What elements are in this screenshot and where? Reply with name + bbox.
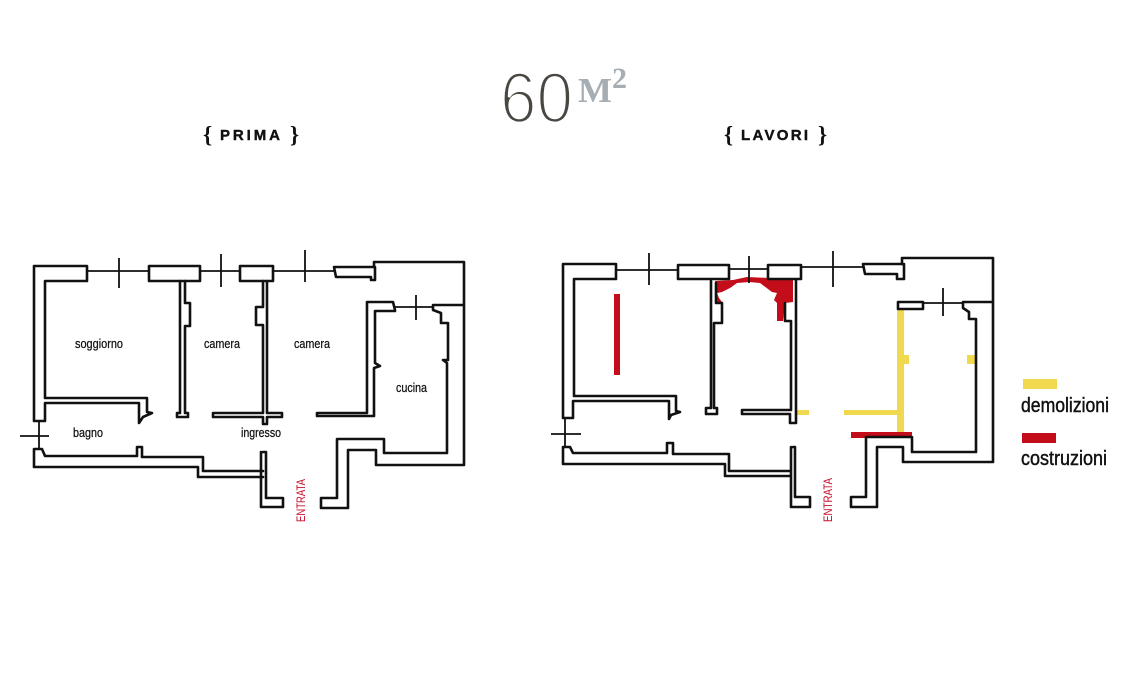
panel: floor plan works: [551, 251, 993, 522]
title: 60 m2: 2: [612, 62, 627, 95]
heading: lavori: {: [724, 122, 733, 147]
label: entrata: ENTRATA: [296, 479, 308, 522]
walls: works: [563, 258, 993, 507]
room labels: [73, 336, 428, 440]
heading: prima: {: [203, 122, 212, 147]
room labels: camera: [294, 336, 331, 351]
panel: floor plan before: [20, 250, 464, 522]
title: 60 m2: [500, 60, 627, 138]
heading: lavori: }: [818, 122, 827, 147]
windows: works: [551, 251, 963, 447]
title: 60 m2: M: [578, 71, 612, 110]
room labels: cucina: [396, 380, 428, 395]
red construction marks: [614, 277, 912, 438]
room labels: bagno: [73, 425, 103, 440]
windows: before: [20, 250, 433, 449]
walls: before: [34, 262, 464, 508]
label: entrata: ENTRATA: [823, 478, 835, 522]
legend: [1021, 379, 1109, 470]
heading: prima: PRIMA: [220, 127, 280, 144]
legend: demolizioni: demolizioni: [1021, 395, 1109, 417]
heading: lavori: LAVORI: [741, 127, 808, 144]
heading: prima: }: [290, 122, 299, 147]
title: 60 m2: 60: [500, 60, 573, 138]
yellow demolition marks: [797, 310, 975, 432]
legend: costruzioni: costruzioni: [1021, 448, 1107, 470]
room labels: ingresso: [241, 425, 281, 440]
room labels: camera: [204, 336, 241, 351]
heading: prima: [203, 122, 299, 147]
heading: lavori: [724, 122, 827, 147]
room labels: soggiorno: [75, 336, 123, 351]
